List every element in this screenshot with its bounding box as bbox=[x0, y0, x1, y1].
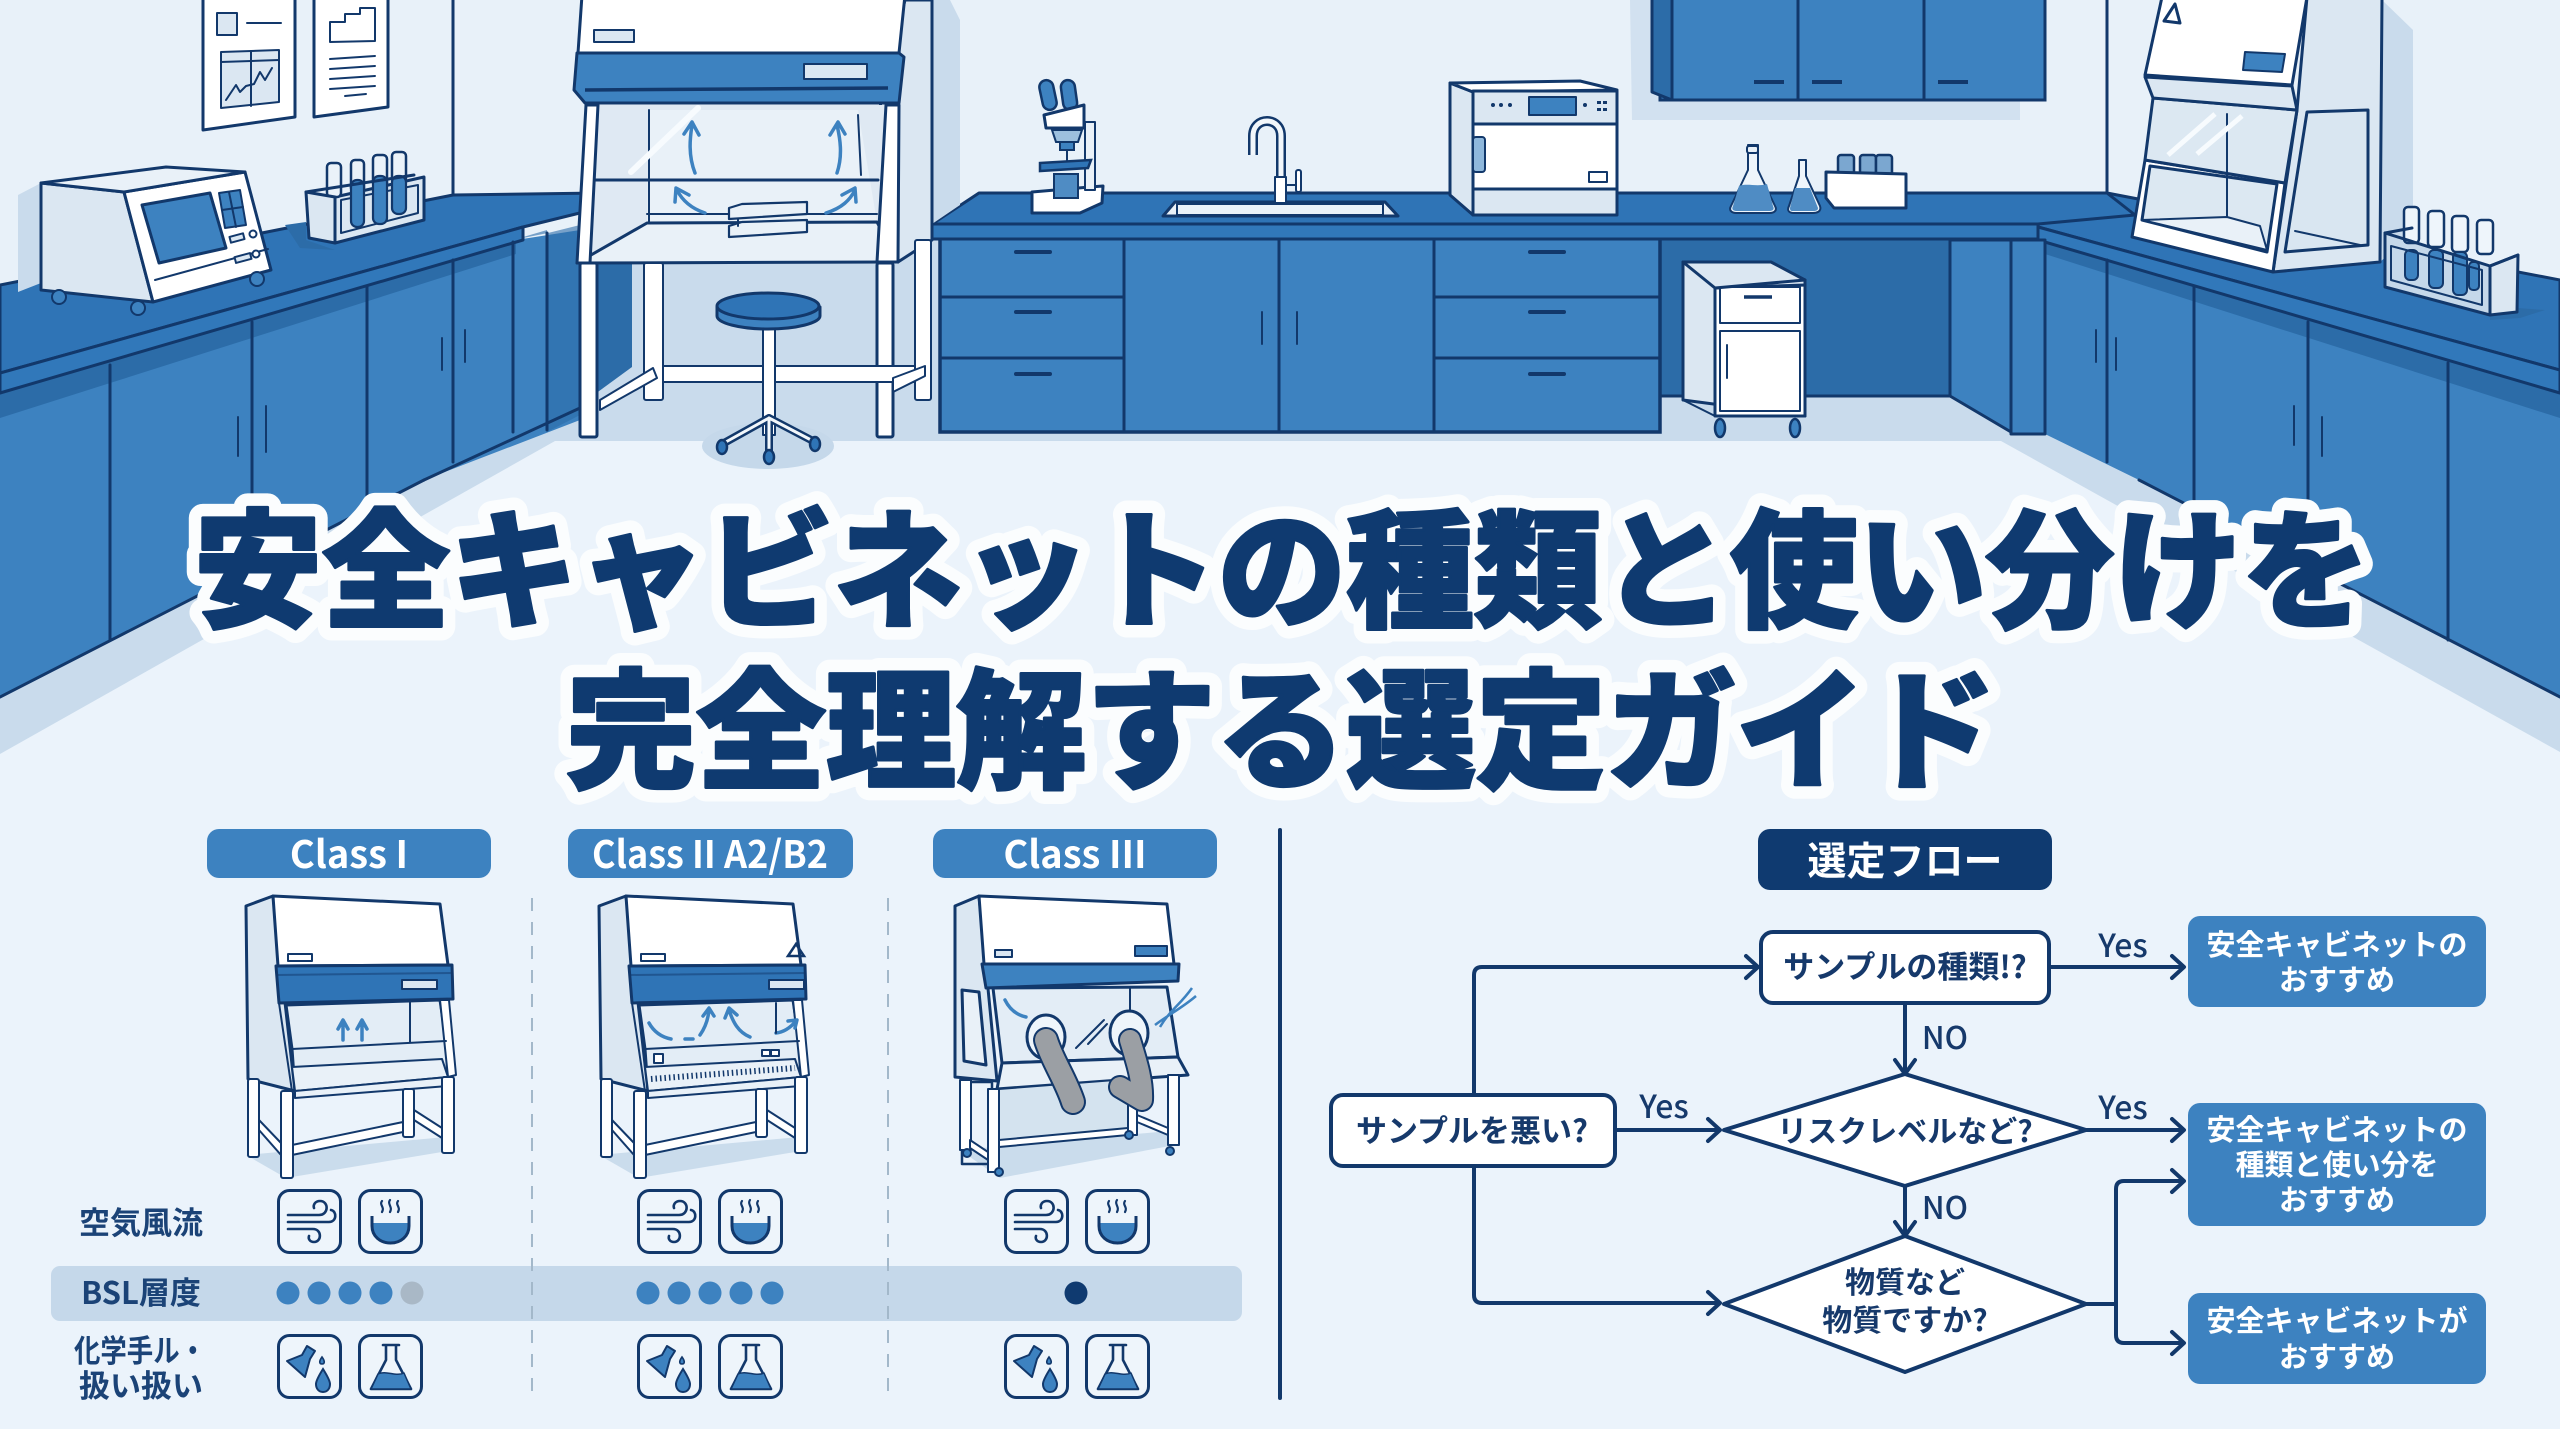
NO labels bbox=[1922, 1013, 1968, 1228]
result 2: 安全キャビネットの bbox=[2206, 1107, 2468, 1149]
Yes labels: Yes bbox=[2097, 1083, 2148, 1129]
microscope bbox=[1032, 79, 1103, 213]
back counter and cabinets bbox=[930, 193, 2135, 434]
chemical icons row bbox=[278, 1336, 1148, 1398]
row label: BSL層度: BSL層度 bbox=[81, 1268, 201, 1313]
row label: 空気風流: 空気風流 bbox=[79, 1198, 203, 1243]
header: Class I bbox=[207, 824, 491, 879]
header: Class III bbox=[933, 824, 1217, 879]
title: 安全キャビネットの種類と使い分けを bbox=[194, 469, 2370, 654]
cabinet: Class III bbox=[955, 896, 1196, 1178]
result 3 bbox=[2188, 1293, 2486, 1384]
cabinet: Class I bbox=[246, 896, 456, 1178]
title: 安全キャビネットの種類と使い分けを bbox=[194, 469, 2370, 654]
left counter and cabinets bbox=[0, 193, 632, 697]
result 2: おすすめ bbox=[2279, 1177, 2395, 1219]
test tube rack left bbox=[285, 152, 424, 250]
result 2 bbox=[2188, 1103, 2486, 1226]
connectors bbox=[1474, 956, 2184, 1354]
diamond: 物質など物質ですか?: 物質ですか? bbox=[1822, 1296, 1988, 1340]
BSL band bbox=[51, 1266, 1242, 1321]
header: Class II: Class II A2/B2 bbox=[592, 824, 828, 879]
row label: 化学手ル・扱い扱い: 化学手ル・ bbox=[74, 1326, 206, 1371]
result 1 bbox=[2188, 916, 2486, 1007]
header: Class III: Class III bbox=[1003, 824, 1147, 879]
title: 完全理解する選定ガイド bbox=[566, 628, 1996, 816]
Yes labels: Yes bbox=[1638, 1082, 1689, 1128]
decision: サンプルの種類!? bbox=[1761, 932, 2049, 1003]
test tube rack right bbox=[2385, 207, 2545, 320]
flasks and sample box bbox=[1730, 145, 1906, 213]
right counter and cabinets bbox=[2020, 193, 2560, 697]
result 2: 種類と使い分を bbox=[2235, 1142, 2439, 1184]
cabinet: Class II bbox=[599, 896, 809, 1178]
diamond: リスクレベルなど? bbox=[1724, 1074, 2086, 1186]
decision: サンプルを悪い? bbox=[1331, 1095, 1615, 1166]
panel: selection flow bbox=[1331, 829, 2486, 1384]
result 3: 安全キャビネットが bbox=[2206, 1298, 2468, 1340]
flow heading bbox=[1758, 829, 2052, 890]
diamond: 物質など物質ですか? bbox=[1724, 1236, 2086, 1372]
rolling cart bbox=[1683, 262, 1805, 437]
diamond: リスクレベルなど?: リスクレベルなど? bbox=[1777, 1107, 2033, 1151]
stool bbox=[702, 293, 834, 469]
row label: 化学手ル・扱い扱い bbox=[74, 1326, 206, 1406]
BSL level dots bbox=[276, 1282, 1088, 1304]
result 3: おすすめ bbox=[2279, 1334, 2395, 1376]
column dividers bbox=[532, 898, 888, 1398]
airflow icons row bbox=[278, 1190, 1148, 1252]
row label: 化学手ル・扱い扱い: 扱い扱い bbox=[79, 1361, 203, 1406]
flow heading: 選定フロー bbox=[1807, 831, 2003, 887]
title: 完全理解する選定ガイド bbox=[566, 628, 1996, 816]
NO labels: NO bbox=[1922, 1013, 1968, 1058]
right cabinet on counter bbox=[2132, 0, 2413, 272]
decision: サンプルの種類!?: サンプルの種類!? bbox=[1783, 942, 2027, 987]
Yes labels bbox=[1638, 921, 2148, 1129]
decision: サンプルを悪い?: サンプルを悪い? bbox=[1356, 1106, 1588, 1151]
diamond: 物質など物質ですか?: 物質など bbox=[1845, 1258, 1965, 1302]
header: Class I: Class I bbox=[290, 824, 408, 879]
panel: class comparison bbox=[51, 824, 1242, 1406]
sink and faucet bbox=[1163, 121, 1398, 216]
NO labels: NO bbox=[1922, 1183, 1968, 1228]
wall corner lines bbox=[453, 0, 2107, 197]
main safety cabinet bbox=[574, 0, 960, 437]
result 1: 安全キャビネットの bbox=[2206, 922, 2468, 964]
panel divider line bbox=[1278, 830, 1282, 1398]
Yes labels: Yes bbox=[2097, 921, 2148, 967]
title bbox=[194, 469, 2370, 816]
upper wall cabinet bbox=[1630, 0, 2045, 120]
result 1: おすすめ bbox=[2279, 957, 2395, 999]
incubator bbox=[1450, 81, 1617, 215]
instrument on left counter bbox=[18, 167, 271, 315]
wall posters bbox=[203, 0, 388, 130]
